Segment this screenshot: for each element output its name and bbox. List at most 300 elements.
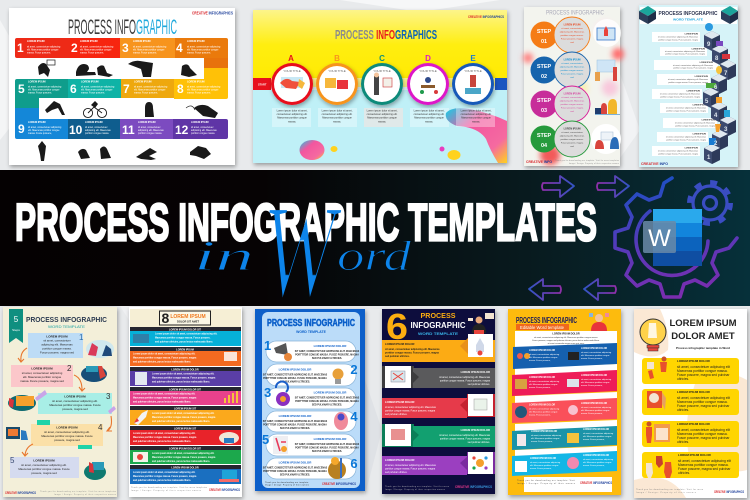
- step D: consectetuer adipiscing elit.: [414, 113, 445, 116]
- subtitle: Process infographic template in Word: [676, 346, 730, 350]
- note 4: 4: [98, 423, 103, 432]
- icon: Microsoft Word: W: [648, 225, 671, 252]
- step 3 band: [382, 394, 495, 418]
- band row one: steps 1 to 4: sit amet, consectetuer adipiscing: [27, 46, 61, 48]
- card 2: sit amet, consectetuer adipiscing elit: [677, 396, 730, 400]
- step B: YOUR TITLE: [328, 69, 346, 73]
- pill 2: PORTTITOR CONGUE MASSA. FUSCE POSUERE, MAGNA: [263, 377, 327, 380]
- arrows: bottom pair pointing left: [529, 279, 616, 300]
- note 5: sit amet, consectetuer adipiscing elit.: [21, 463, 67, 467]
- note 4: posuere, magna sed: [54, 438, 80, 442]
- band: teal: massa. Fusce posuere,: [583, 438, 605, 441]
- pill 4: [263, 409, 358, 432]
- band row two: steps 5 to 8: sit amet, consectetuer adipiscing: [134, 86, 168, 88]
- cube numerals: 9: [707, 42, 711, 48]
- note 4: sit amet, consectetuer adipiscing elit.: [44, 430, 90, 434]
- band 5: LOREM IPSUM SIT: [174, 408, 197, 410]
- step E caption: consectetuer adipiscing elit.: [461, 113, 492, 116]
- row captions: LOREM IPSUM: [702, 120, 715, 122]
- pill 5: LOREM IPSUM DOLOR: [314, 437, 347, 441]
- step 04: sit amet, consectetuer: [561, 131, 583, 134]
- step 01: adipiscing elit. Maecenas: [560, 30, 585, 34]
- step E caption: Maecenas porttitor congue: [461, 116, 491, 120]
- band 3: Maecenas porttitor congue massa. Fusce posuere, magna: [152, 376, 216, 380]
- band: cyan: sit amet, consectetuer adipiscing: [530, 461, 561, 464]
- band: teal: LOREM IPSUM DOLOR: [531, 430, 557, 433]
- row captions: porttitor congue massa. Fusce posuere, magna: [673, 66, 714, 70]
- band: coral: elit. Maecenas porttitor congue: [529, 410, 558, 414]
- row captions: sit amet, consectetuer adipiscing elit. Maecenas: [666, 106, 706, 110]
- band 5: and pulvinar ultricies, purus lectus malesuada libero.: [152, 420, 210, 423]
- step 02: [530, 52, 590, 88]
- subtitle: WORD TEMPLATE: [296, 330, 327, 334]
- illustrations: [6, 340, 114, 480]
- connector column right: [204, 58, 228, 80]
- band 1: [130, 327, 241, 346]
- title box: LOREM IPSUM: [170, 314, 206, 320]
- logo: CREATIVE INFOGRAPHICS: [468, 14, 504, 19]
- band row one: steps 1 to 4: sit amet, consectetuer adipiscing: [133, 46, 167, 48]
- step 02: Fusce posuere, magna: [561, 72, 584, 76]
- band: coral: sit amet, consectetuer adipiscing: [581, 406, 612, 409]
- band: blue: massa. Fusce posuere,: [529, 359, 551, 362]
- footer: Thank you for downloading our template. Visit for more: [636, 488, 703, 491]
- step 3 band: sed pulvinar ultricies.: [385, 413, 408, 416]
- footer: Image / Design: Property of their owners: [517, 482, 575, 485]
- step 01: LOREM IPSUM: [564, 24, 580, 26]
- card 3: [642, 421, 739, 447]
- row captions: LOREM IPSUM: [695, 76, 708, 78]
- pill 1: PORTTITOR CONGUE MASSA. FUSCE POSUERE, MAGNA: [295, 354, 359, 356]
- band 6: [130, 426, 241, 445]
- step C: C: [379, 54, 385, 63]
- banner subtitle: in Word: ord: [337, 234, 412, 280]
- footer: Thank you for downloading our template. Visit for more templates: [40, 490, 116, 493]
- band row one: steps 1 to 4: LOREM IPSUM: [27, 40, 45, 43]
- corner cubes: [639, 6, 738, 24]
- step 04: LOREM IPSUM: [564, 128, 580, 130]
- row captions: porttitor congue massa. Fusce posuere, magna: [660, 96, 701, 98]
- step 03: Fusce posuere, magna: [561, 106, 584, 110]
- band row one: steps 1 to 4: elit. Maecenas porttitor congue: [27, 48, 59, 52]
- band row three: steps 9 to 12: porttitor congue massa.: [85, 132, 109, 135]
- band: pink: sit amet, consectetuer adipiscing: [581, 378, 612, 381]
- white stripes between bands: [515, 364, 617, 492]
- cube numerals: 7: [724, 71, 728, 77]
- title box: DOLOR SIT AMET: [177, 320, 199, 324]
- footer: [5, 490, 116, 496]
- note 5: [10, 456, 79, 478]
- band: teal: [512, 426, 617, 450]
- band 2: [130, 347, 241, 366]
- step C: Lorem ipsum dolor sit amet,: [367, 110, 398, 112]
- intro box: [515, 331, 617, 347]
- tag: Editable Word template: [520, 325, 565, 330]
- band row three: steps 9 to 12: sit amet, consectetuer: [191, 126, 214, 129]
- header band: [640, 7, 737, 24]
- band row two: steps 5 to 8: elit. Maecenas porttitor congue: [134, 88, 166, 92]
- connector column left: [15, 98, 39, 120]
- panel: four steps infographic: [523, 7, 624, 166]
- band: pink: LOREM IPSUM DOLOR: [529, 376, 555, 379]
- illustration 02: [595, 60, 617, 81]
- card 1: ultricies.: [677, 377, 689, 381]
- step 04: [530, 121, 590, 157]
- step 5 band: sit amet, consectetuer adipiscing elit. Maecenas: [385, 464, 437, 467]
- row captions: porttitor congue massa. Fusce posuere, magna: [658, 38, 699, 42]
- card 2: Fusce posuere, magna sed pulvinar: [677, 404, 730, 408]
- step 01: [530, 17, 590, 53]
- band: cyan: elit. Maecenas porttitor congue: [583, 461, 612, 464]
- decorative blobs: [300, 140, 460, 160]
- band 4: LOREM IPSUM DOLOR SIT: [169, 388, 201, 392]
- soft background blobs: [523, 20, 624, 165]
- pill 6: 6: [350, 456, 358, 471]
- cube numerals: 3: [724, 127, 728, 133]
- cube numerals: 2: [714, 141, 718, 147]
- card 3: ultricies.: [677, 440, 689, 444]
- band row three: steps 9 to 12: LOREM IPSUM: [191, 121, 209, 124]
- footer: Thank you for downloading our template.: [265, 481, 309, 484]
- band 1: Lorem ipsum dolor sit amet, consectetuer adipiscing elit.: [155, 332, 218, 336]
- step 04: sed: [570, 146, 575, 148]
- illustrations: row one people: [38, 60, 197, 77]
- title: PROCESS INFOGRAPHIC: [546, 10, 605, 16]
- footer logo and note: [526, 159, 619, 165]
- band 5: Maecenas porttitor congue massa. Fusce posuere, magna: [152, 416, 216, 419]
- band: coral: sit amet, consectetuer adipiscing: [529, 408, 560, 410]
- step 03: STEP: [537, 98, 552, 104]
- row captions: LOREM IPSUM: [693, 134, 706, 136]
- band: teal: LOREM IPSUM DOLOR: [583, 428, 609, 431]
- step 2 band: sit amet, consectetuer adipiscing elit. Maecenas: [439, 376, 491, 379]
- band: teal: massa. Fusce posuere,: [531, 440, 553, 443]
- note 1: 1: [79, 333, 84, 342]
- card 3: Maecenas porttitor congue massa.: [677, 432, 728, 436]
- band row three: steps 9 to 12: 11: [122, 123, 135, 137]
- panel: six steps pills template: [255, 309, 365, 491]
- pill 4: PORTTITOR CONGUE MASSA. FUSCE POSUERE, MAGNA: [263, 424, 327, 426]
- band row two: steps 5 to 8: 7: [123, 82, 130, 96]
- step 1 band: LOREM IPSUM DOLOR: [385, 342, 414, 346]
- pill 1: SED PULVINAR ULTRICIES.: [312, 357, 342, 360]
- band row three: steps 9 to 12: [15, 119, 228, 139]
- note 1: sit amet, consectetuer: [43, 338, 71, 342]
- step 1 band: sit amet, consectetuer adipiscing elit. Maecenas: [385, 348, 440, 351]
- row captions: LOREM IPSUM: [692, 48, 705, 50]
- step 02: porttitor congue massa.: [561, 69, 584, 72]
- band row three: steps 9 to 12: LOREM IPSUM: [85, 121, 103, 124]
- pill 3: 3: [264, 385, 271, 400]
- band 7: LOREM IPSUM DOLOR SIT: [169, 448, 201, 450]
- band row three: steps 9 to 12: adipiscing elit. Maecenas: [191, 129, 218, 132]
- band 7: [130, 446, 241, 464]
- note 3: 3: [106, 392, 111, 401]
- panel: six process navy template: [382, 306, 495, 494]
- band row two: steps 5 to 8: 6: [70, 82, 77, 96]
- band row two: steps 5 to 8: [15, 79, 228, 99]
- band row three: steps 9 to 12: sit amet, consectetuer adipiscing: [28, 126, 62, 129]
- footer: Image / Design: Property of their respective owners: [385, 488, 445, 491]
- footer: Image / Design: Property of their respective owners: [54, 493, 116, 496]
- band row three: steps 9 to 12: sit amet, consectetuer: [138, 126, 161, 129]
- row captions: sit amet, consectetuer adipiscing elit. Maecenas: [665, 50, 705, 53]
- band row one: steps 1 to 4: 3: [122, 41, 129, 55]
- row captions: sit amet, consectetuer adipiscing elit. Maecenas: [658, 150, 698, 152]
- cube numerals: 1: [707, 155, 711, 161]
- big six: 6: [386, 306, 408, 347]
- band row three: steps 9 to 12: massa. Fusce posuere,: [28, 132, 52, 135]
- panel: eight bands template: [129, 307, 242, 497]
- row captions: porttitor congue massa. Fusce posuere, magna: [675, 124, 716, 128]
- step B: massa.: [333, 120, 341, 124]
- step A: [271, 54, 313, 127]
- panel: nine-step staircase word template: [639, 5, 738, 167]
- note 2: massa. Fusce posuere, magna sed: [20, 379, 64, 383]
- band row one: steps 1 to 4: LOREM IPSUM: [187, 40, 205, 43]
- band row one: steps 1 to 4: massa. Fusce posuere,: [187, 52, 211, 54]
- step C: consectetuer adipiscing elit.: [367, 113, 398, 116]
- cube icons: [705, 23, 730, 145]
- band: teal: elit. Maecenas porttitor congue: [583, 435, 612, 438]
- panel: editable word template amber: [508, 309, 621, 495]
- note 4: [31, 423, 103, 446]
- card 1: Maecenas porttitor congue massa.: [677, 369, 728, 373]
- band: coral: LOREM IPSUM DOLOR: [529, 404, 555, 406]
- band: coral: LOREM IPSUM DOLOR: [581, 402, 607, 405]
- note 3: posuere, magna sed: [62, 407, 88, 411]
- band: cyan: massa. Fusce posuere,: [583, 464, 605, 467]
- band row one: steps 1 to 4: LOREM IPSUM: [80, 40, 98, 43]
- title: [669, 318, 737, 342]
- footer: CREATIVE INFOGRAPHICS: [5, 490, 36, 495]
- band 8: [130, 465, 241, 484]
- row captions: LOREM IPSUM: [687, 90, 700, 92]
- step B: [316, 54, 358, 127]
- band: pink: elit. Maecenas porttitor congue: [529, 383, 558, 386]
- band 2: LOREM IPSUM: [176, 348, 194, 352]
- band: blue: LOREM IPSUM DOLOR: [529, 349, 555, 352]
- band 6: LOREM IPSUM SIT: [174, 428, 197, 430]
- note 1: [28, 333, 84, 358]
- step 5 band: LOREM IPSUM DOLOR: [385, 458, 414, 462]
- step E: E: [470, 54, 476, 63]
- band: blue: LOREM IPSUM DOLOR: [581, 347, 607, 350]
- intro box: sit amet commodo magna eros quis urna.: [548, 342, 585, 345]
- row captions: LOREM IPSUM: [693, 104, 706, 106]
- pill 2: LOREM IPSUM DOLOR: [279, 368, 312, 372]
- band 8: Lorem ipsum dolor sit amet, consectetuer adipiscing elit.: [133, 471, 196, 474]
- icon: large gear: [615, 178, 737, 297]
- pill 1: 1: [264, 338, 271, 353]
- footer: Thank you for downloading our template. Visit for more: [385, 485, 449, 488]
- card 1: Fusce posuere, magna sed pulvinar: [677, 373, 730, 377]
- icon: Microsoft Word: [643, 209, 702, 266]
- band 2: Maecenas porttitor congue massa. Fusce posuere, magna: [133, 356, 197, 360]
- band: pink: elit. Maecenas porttitor congue: [581, 381, 610, 384]
- footer: Thank you for downloading our template. Visit for more templates: [131, 486, 207, 489]
- band row three: steps 9 to 12: porttitor congue massa.: [138, 132, 162, 135]
- ribbon: Steps: [12, 328, 20, 332]
- band 1: Maecenas porttitor congue massa. Fusce posuere,: [155, 336, 211, 340]
- title: PROCESS INFOGRAPHIC: [68, 16, 177, 39]
- step 03: 03: [541, 108, 547, 114]
- band: pink: LOREM IPSUM DOLOR: [581, 374, 607, 377]
- note 3: sit amet, consectetuer adipiscing elit.: [52, 399, 98, 403]
- step E caption: massa.: [472, 120, 480, 124]
- step D: [407, 54, 449, 127]
- band row three: steps 9 to 12: 9: [18, 122, 25, 136]
- panel: lorem ipsum yellow cards template: [634, 309, 747, 498]
- card 1: LOREM IPSUM DOLOR: [677, 359, 711, 363]
- band: cyan: elit. Maecenas porttitor congue: [530, 464, 559, 467]
- band row two: steps 5 to 8: LOREM IPSUM: [28, 80, 46, 84]
- band 2: Lorem ipsum dolor sit amet, consectetuer adipiscing elit.: [133, 352, 196, 356]
- row captions: sit amet, consectetuer adipiscing elit. Maecenas: [658, 36, 698, 38]
- row captions: sit amet, consectetuer adipiscing elit. Maecenas: [666, 136, 706, 138]
- band row one: steps 1 to 4: elit. Maecenas porttitor congue: [187, 48, 219, 52]
- pill 2: 2: [350, 362, 358, 377]
- band: blue: [513, 343, 617, 369]
- band 1: LOREM IPSUM DOLOR SIT: [169, 328, 201, 332]
- pill 3: PORTTITOR CONGUE MASSA. FUSCE POSUERE, MAGNA: [295, 400, 359, 403]
- band row two: steps 5 to 8: sit amet, consectetuer adipiscing: [81, 86, 115, 88]
- row captions: porttitor congue massa. Fusce posuere, magna: [658, 152, 699, 156]
- step A: massa.: [288, 120, 296, 124]
- pill 2: SIT AMET, CONSECTETUER ADIPISCING ELIT. MAECENAS: [263, 374, 328, 376]
- pill 4: SED PULVINAR ULTRICIES.: [280, 427, 310, 430]
- step E caption: [456, 108, 495, 127]
- footer: CREATIVE INFOGRAPHICS: [580, 480, 612, 485]
- band row two: steps 5 to 8: sit amet, consectetuer adipiscing: [187, 86, 221, 88]
- step 04: adipiscing elit. Maecenas: [560, 134, 585, 138]
- band row three: steps 9 to 12: porttitor congue massa.: [191, 132, 215, 135]
- step 3 band: LOREM IPSUM DOLOR: [385, 400, 414, 404]
- illustrations: row three people: [38, 141, 211, 161]
- band 6: Lorem ipsum dolor sit amet, consectetuer adipiscing elit.: [133, 432, 196, 435]
- row captions: porttitor congue massa. Fusce posuere, magna: [665, 52, 706, 56]
- footer: CREATIVE INFOGRAPHICS: [455, 484, 492, 489]
- row captions: sit amet, consectetuer adipiscing elit. Maecenas: [675, 122, 715, 124]
- cube numerals: [705, 42, 728, 161]
- step A: Maecenas porttitor congue: [277, 116, 307, 120]
- band: cyan: LOREM IPSUM DOLOR: [583, 454, 609, 457]
- row captions: porttitor congue massa. Fusce posuere, magna: [668, 81, 709, 84]
- band: blue: elit. Maecenas porttitor congue: [529, 356, 558, 359]
- band 8: LOREM IPSUM DOLOR: [171, 466, 199, 470]
- step 4 band: sit amet, consectetuer adipiscing elit. Maecenas: [439, 434, 491, 437]
- band row three: steps 9 to 12: 12: [175, 123, 189, 137]
- step 01: porttitor congue massa.: [561, 34, 584, 37]
- pill 6: PORTTITOR CONGUE MASSA. FUSCE POSUERE, MAGNA: [263, 470, 327, 473]
- band: blue: massa. Fusce posuere,: [581, 357, 603, 360]
- band 3: and pulvinar ultricies, purus lectus malesuada libero.: [152, 380, 210, 384]
- band 5: Lorem ipsum dolor sit amet, consectetuer adipiscing elit.: [152, 412, 215, 415]
- staircase cubes: [703, 31, 736, 164]
- step 5 band: [382, 452, 495, 475]
- step 01: Fusce posuere, magna: [561, 38, 584, 40]
- title box: 8: [162, 310, 170, 326]
- step 04: Fusce posuere, magna: [561, 142, 584, 144]
- band row two: steps 5 to 8: 8: [177, 82, 184, 96]
- footer logo and note: Image / Design: Property of their respective owners: [569, 162, 619, 165]
- band row one: steps 1 to 4: 4: [176, 41, 183, 55]
- step C: Maecenas porttitor congue: [367, 116, 397, 120]
- title: WORD TEMPLATE: [418, 332, 458, 336]
- pill 6: SIT AMET, CONSECTETUER ADIPISCING ELIT. MAECENAS: [263, 466, 328, 470]
- cube numerals: 4: [714, 113, 718, 119]
- pill 6: [263, 456, 358, 479]
- card 1: sit amet, consectetuer adipiscing elit: [677, 365, 730, 369]
- band: cyan: sit amet, consectetuer adipiscing: [583, 458, 614, 461]
- step E caption: Lorem ipsum dolor sit amet,: [461, 110, 492, 112]
- pill 4: SIT AMET, CONSECTETUER ADIPISCING ELIT. MAECENAS: [263, 420, 328, 423]
- step 01: sit amet, consectetuer: [561, 27, 583, 30]
- card 4: [642, 452, 739, 478]
- band 7: Maecenas porttitor congue massa. Fusce posuere, magna: [152, 456, 216, 459]
- band row two: steps 5 to 8: massa. Fusce posuere,: [187, 92, 211, 94]
- band row two: steps 5 to 8: massa. Fusce posuere,: [134, 92, 158, 94]
- step D: massa.: [425, 120, 433, 124]
- intro box: LOREM IPSUM DOLOR: [552, 332, 580, 336]
- band row two: steps 5 to 8: massa. Fusce posuere,: [81, 92, 105, 94]
- title: PROCESS: [420, 311, 456, 320]
- intro box: sit amet, consectetuer adipiscing elit. Maecenas porttitor congue massa.: [534, 336, 598, 339]
- band row two: steps 5 to 8: elit. Maecenas porttitor congue: [187, 88, 219, 92]
- step 03: [530, 86, 590, 122]
- step 01: 01: [541, 39, 547, 45]
- step 03: LOREM IPSUM: [564, 92, 580, 96]
- band: coral: massa. Fusce posuere,: [581, 412, 603, 415]
- step 01: sed: [570, 42, 575, 44]
- band row one: steps 1 to 4: elit. Maecenas porttitor congue: [80, 48, 112, 52]
- band: teal: sit amet, consectetuer adipiscing: [583, 432, 614, 435]
- step 2 band: [382, 366, 495, 388]
- band: cyan: [512, 451, 617, 476]
- step 4 band: sed pulvinar ultricies.: [468, 441, 490, 444]
- pill 5: SED PULVINAR ULTRICIES.: [312, 450, 342, 453]
- banner subtitle: in Word: in: [194, 234, 254, 280]
- title: INFOGRAPHIC: [410, 321, 466, 330]
- row captions: porttitor congue massa. Fusce posuere, magna: [666, 138, 707, 142]
- step A: A: [288, 54, 294, 63]
- band row two: steps 5 to 8: 5: [18, 82, 25, 96]
- band row two: steps 5 to 8: massa. Fusce posuere,: [28, 92, 52, 94]
- band row two: steps 5 to 8: LOREM IPSUM: [187, 80, 205, 84]
- step 5 band: porttitor congue massa. Fusce posuere, magna: [385, 468, 436, 470]
- band: teal: sit amet, consectetuer adipiscing: [531, 434, 562, 437]
- step E: [452, 54, 494, 105]
- pill 2: [263, 362, 358, 386]
- pill 4: 4: [350, 409, 358, 424]
- subtitle: WORD TEMPLATE: [48, 325, 86, 329]
- band row three: steps 9 to 12: elit. Maecenas porttitor congue: [28, 129, 60, 132]
- row captions: porttitor congue massa. Fusce posuere, magna: [666, 110, 707, 112]
- note 4: LOREM IPSUM: [56, 426, 78, 430]
- card 4: LOREM IPSUM DOLOR: [678, 453, 712, 457]
- pill 3: SED PULVINAR ULTRICIES.: [312, 404, 342, 406]
- footer: [636, 488, 744, 494]
- step B: consectetuer adipiscing elit.: [322, 113, 353, 116]
- intro box: Fusce posuere, magna sed pulvinar ultricies, purus lectus malesuada libero.: [532, 339, 600, 342]
- step D: YOUR TITLE: [419, 69, 437, 73]
- orange connector arrows: [18, 348, 112, 456]
- step 3 band: porttitor congue massa. Fusce posuere, magna: [385, 410, 436, 412]
- band 8: Maecenas porttitor congue massa. Fusce posuere, magna: [133, 475, 197, 478]
- note 3: [38, 392, 112, 414]
- step 02: LOREM IPSUM: [564, 58, 580, 62]
- note 1: porttitor congue massa.: [42, 346, 72, 350]
